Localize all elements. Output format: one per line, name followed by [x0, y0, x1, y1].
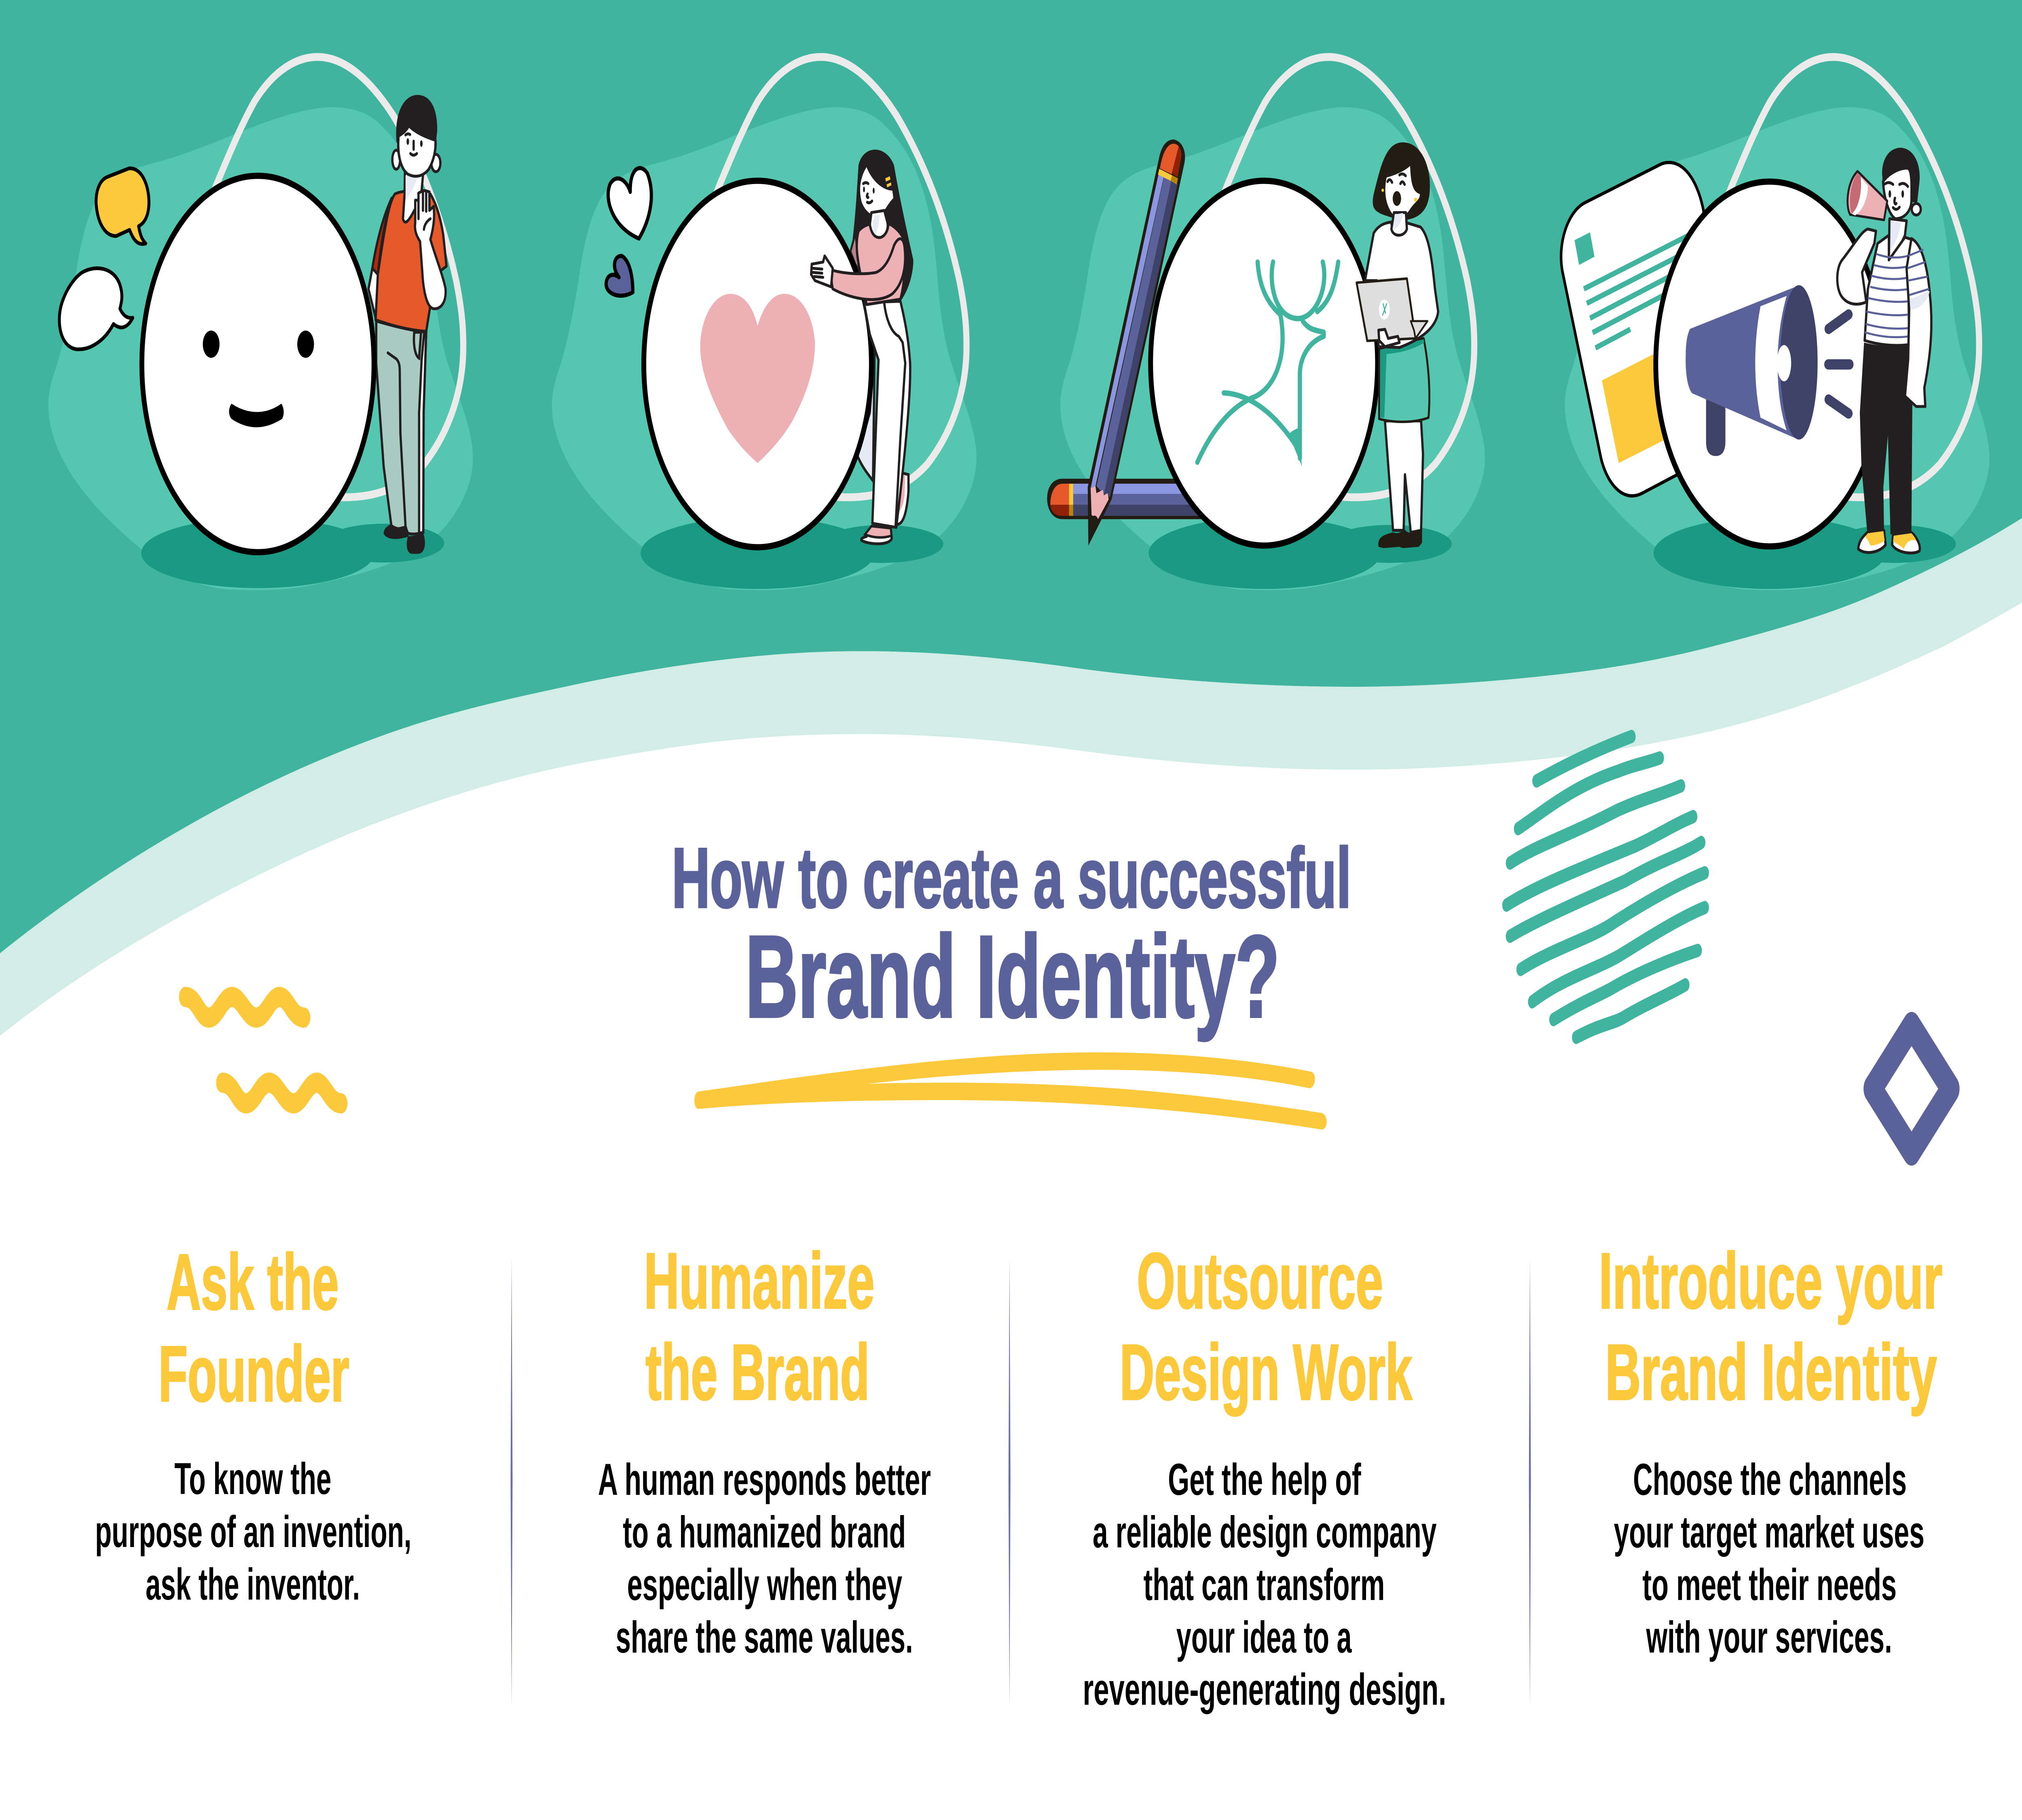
icon: deer logo — [1197, 262, 1338, 466]
body text: share the same values. — [615, 1613, 913, 1662]
panel 2: humanize the brand illustration — [552, 57, 977, 590]
ground shadows — [1148, 517, 1452, 589]
light wave band — [0, 518, 2022, 1036]
person: man with orange shirt — [368, 95, 446, 554]
panel 1: ask the founder illustration — [49, 57, 473, 590]
heading: Design Work — [1120, 1329, 1412, 1416]
body text: purpose of an invention, — [95, 1507, 412, 1557]
background blob — [1565, 107, 1989, 590]
body text: especially when they — [627, 1560, 902, 1610]
card: outsource design work — [1083, 1237, 1446, 1714]
icon: purple heart — [606, 256, 633, 296]
body text: Choose the channels — [1633, 1455, 1907, 1505]
heading: Founder — [159, 1330, 349, 1418]
icon: horizontal pencil — [1047, 479, 1217, 519]
decoration: yellow squiggles — [185, 997, 341, 1103]
icon: yellow speech bubble — [96, 168, 149, 244]
heading: Brand Identity — [1605, 1329, 1937, 1416]
divider — [1009, 1257, 1011, 1708]
body text: that can transform — [1144, 1560, 1385, 1610]
divider — [1529, 1257, 1531, 1708]
card: introduce your brand identity — [1599, 1237, 1942, 1662]
ground shadows — [1654, 517, 1956, 589]
background blob — [552, 107, 977, 590]
body text: your idea to a — [1176, 1613, 1352, 1662]
body text: To know the — [174, 1454, 331, 1504]
decoration: hatched circle — [1506, 736, 1705, 1037]
person: woman with laptop — [1357, 142, 1438, 548]
body text — [598, 1455, 931, 1662]
body text: revenue-generating design. — [1083, 1665, 1446, 1714]
icon: vertical pencil — [1088, 140, 1185, 546]
big circle with deer logo — [1151, 181, 1377, 546]
icon: white speech bubble — [59, 268, 133, 349]
title: How to create a successful — [672, 831, 1351, 926]
divider — [510, 1257, 513, 1708]
big circle — [644, 181, 871, 547]
body text — [95, 1454, 412, 1609]
title — [672, 831, 1351, 1041]
card: ask the founder — [95, 1238, 412, 1609]
heading: Humanize — [644, 1237, 875, 1325]
icon: document — [1561, 163, 1716, 496]
body text: to a humanized brand — [623, 1508, 906, 1557]
outline loop — [683, 57, 967, 497]
body text: a reliable design company — [1093, 1508, 1437, 1557]
person: back layers — [850, 150, 913, 524]
ground shadows — [641, 517, 943, 589]
person: woman in pink sweater — [811, 167, 910, 544]
decoration: purple diamond — [1872, 1026, 1951, 1151]
title: Brand Identity? — [745, 912, 1280, 1041]
icon: white heart — [608, 168, 651, 239]
background blob — [49, 107, 473, 590]
heading: Ask the — [167, 1238, 339, 1326]
outline loop — [180, 57, 463, 497]
outline loop — [1696, 57, 1979, 497]
panel 3: outsource design work illustration — [1047, 57, 1485, 590]
heading: Introduce your — [1599, 1237, 1942, 1325]
heading: Outsource — [1137, 1237, 1383, 1325]
icon: sound rays — [1828, 315, 1850, 413]
face smile — [229, 404, 284, 427]
heading — [1120, 1237, 1412, 1416]
body text: to meet their needs — [1642, 1560, 1897, 1610]
body text: A human responds better — [598, 1455, 931, 1505]
outline loop — [1191, 57, 1474, 497]
heading — [644, 1237, 875, 1416]
body text: with your services. — [1646, 1613, 1892, 1662]
body text — [1083, 1455, 1446, 1714]
big face circle — [142, 176, 374, 552]
body text — [1614, 1455, 1925, 1662]
card: humanize the brand — [598, 1237, 931, 1662]
background blob — [1060, 107, 1485, 590]
icon: megaphone — [1686, 285, 1818, 456]
body text: Get the help of — [1168, 1455, 1361, 1505]
big circle with megaphone — [1656, 182, 1883, 546]
heading — [159, 1238, 349, 1418]
person: man with mini megaphone — [1837, 148, 1931, 553]
body text: ask the inventor. — [146, 1560, 360, 1609]
teal header background — [0, 0, 2022, 953]
panel 4: introduce your brand illustration — [1561, 57, 1989, 590]
heading — [1599, 1237, 1942, 1416]
ground shadows — [141, 518, 444, 588]
heading: the Brand — [645, 1329, 869, 1416]
yellow underline swoosh — [694, 1052, 1327, 1130]
face eyes — [203, 330, 314, 358]
body text: your target market uses — [1614, 1508, 1925, 1557]
icon: big pink heart — [700, 294, 815, 463]
